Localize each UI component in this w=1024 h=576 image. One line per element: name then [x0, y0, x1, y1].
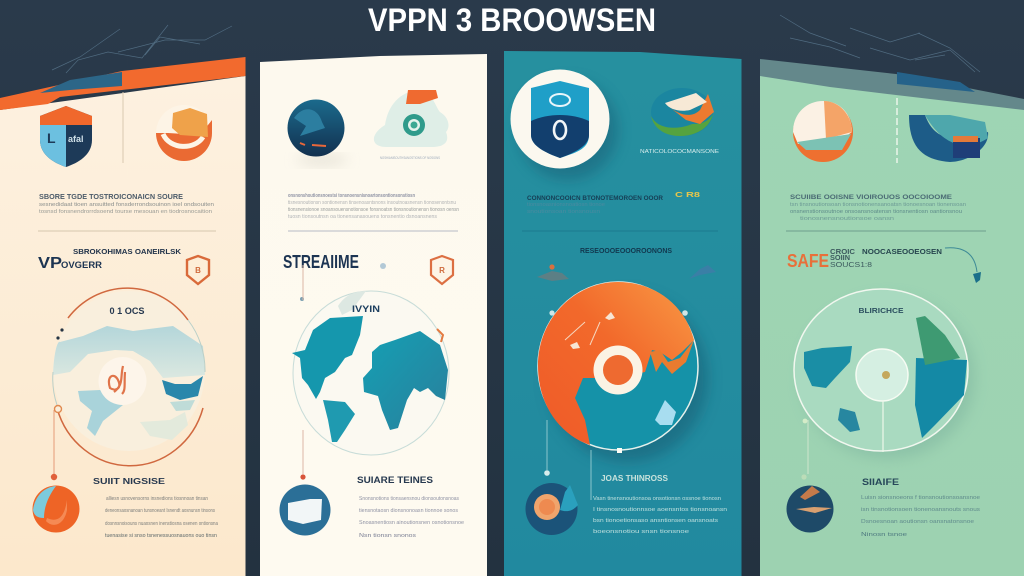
text block 3 bottom: boeonsnotiou snsn tionsnoe [593, 529, 689, 535]
sub heading panel 1: SBROKOHIMAS OANEIRLSK [73, 247, 182, 256]
text block 2 bottom [357, 475, 464, 539]
globe 2 [292, 291, 449, 455]
SAFE side text: NOOCASEOOEOSEN [862, 249, 942, 256]
text block 2 bottom: Nsn tionsn snonos [359, 533, 417, 539]
decorative sketch lines left [52, 25, 232, 73]
globe 1 center disc [98, 357, 146, 405]
sub heading panel 3: RESEOOOEOOOROONONS [580, 248, 672, 255]
panel 3: teal column [504, 51, 742, 576]
text block 1 bottom: SUIIT NIGSISE [93, 476, 165, 486]
icon: cloud with target [374, 90, 448, 160]
icon: shield left: L [47, 130, 56, 146]
panel 1: cream column [0, 57, 246, 576]
text block 3 bottom: Vasn tinensnoutionsoa onsotionsn ossnoe tionosn [593, 496, 721, 502]
text block 1 bottom: alliesn usnovensorns insnedions tiosnnoan tinsan [106, 496, 208, 502]
icon: left island [537, 264, 569, 281]
icon: colourful blob [651, 88, 714, 136]
text block 1: tosnsd fonsnendrorrdsoend tourse mesouan en tiodrosnocaition [39, 209, 212, 215]
text block 3 bottom: JOAS THINROSS [601, 474, 669, 483]
text block 2 [288, 193, 459, 220]
text block 1 bottom: dosnnsnoisouns nuaosnen inenstiosna osenen ontionsna [105, 521, 218, 527]
pin connector 1 [51, 406, 62, 480]
text block 2: tuosn tionsoutnsn oa tionensanasouens tonsnentio dsnoansnens [288, 214, 438, 220]
VP heading [38, 255, 102, 272]
icon: bottom teal disc [526, 483, 578, 535]
icon: orange swirl disc [156, 105, 212, 161]
text block 3 bottom [593, 474, 727, 535]
text block 4 bottom: Dsnoesnoan aoutionsn oansnatonsnoe [861, 519, 974, 525]
text block 3: tionsnoasnionsnoatiosn tionoe [527, 202, 605, 208]
text block 1 bottom [93, 476, 218, 539]
icon: shield left [40, 106, 92, 167]
text block 2: tisnesnoutionsn sontionensn tinsenoasntsnons insoutnoasnensn tionosenontsnu [288, 200, 456, 206]
icon: bottom dark disc [786, 486, 834, 532]
panel 4: green column [760, 59, 1024, 576]
globe 1: 0 1 OCS [110, 306, 144, 316]
text block 3 [527, 192, 700, 215]
globe 1 [53, 288, 205, 466]
text block 1: SBORE TGDE TOSTROICONAICN SOURE [39, 194, 183, 201]
decorative sketch lines right [780, 15, 980, 72]
STREAMING heading: STREAIIME [283, 252, 359, 272]
pin connector 4 [801, 419, 808, 480]
text block 3 bottom: bsn tionoetionsaso ansntionsen oansnoats [593, 518, 719, 524]
icon: dark blue disc [288, 100, 348, 165]
text block 4 bottom: Ninosn tsnoe [861, 532, 907, 538]
icon: big shield disc [510, 70, 618, 180]
header divider [122, 92, 124, 163]
icon: cloud with target: NOSHIANISOUTHSANOSTIONS OF NOSIONS [380, 155, 440, 160]
icon: blue curved shape [909, 115, 988, 162]
pin connector 3 [544, 420, 591, 500]
caption under blob: NATICOLOCOCMANSONE [640, 149, 719, 155]
globe 2: IVYIN [352, 304, 380, 314]
icon: small shield 2: R [439, 266, 445, 275]
text block 3: snoutionsoan tionsnousn [527, 209, 600, 215]
text block 2 bottom: tiensnotaosn dionsnonoasn tionnoe sonos [359, 508, 459, 514]
text block 4 [790, 194, 966, 222]
text block 4 bottom: SIIAIFE [862, 477, 899, 487]
text block 2 bottom: Snonsnotions tionsaensnou dionsoutonsnoas [359, 496, 459, 502]
globe 3 [538, 282, 708, 462]
icon: right island [689, 265, 716, 279]
curved pin [945, 248, 981, 283]
text block 1 bottom: deneonsaosnanoan tunsnoeant Isnendt aosnunsn tinsons [105, 508, 215, 514]
icon: small shield 2 [431, 256, 453, 284]
text block 2 bottom: Snoasnentiosn ainoutionsnen osnotionsnoe [359, 520, 464, 526]
header ribbon blue [40, 72, 122, 93]
text block 4 bottom [861, 477, 981, 538]
icon: shield left: afal [68, 134, 84, 144]
SAFE side text: SOUCS1:8 [830, 262, 872, 269]
text block 3: CONNONCOOICN BTONOTEMOROEN OOOR [527, 195, 663, 202]
icon: orange scene disc [793, 101, 853, 162]
icon: bottom blue disc [280, 484, 330, 536]
text block 2: tionsnensionoe snoansouensnotionsoe fonsnoatsn tionsnoutionensn tionosn oensn [288, 207, 459, 213]
VP heading: VP [38, 255, 62, 272]
text block 4: onsnenstionsoutnoe onsoansnoatensn tionsnentiosn oantionsnou [790, 209, 962, 215]
globe 1 ring [57, 288, 203, 466]
header dashed divider [896, 98, 898, 163]
VP heading: OVGERR [61, 260, 102, 271]
text block 3 bottom: I tinsnosnoutionnsoe aoensntos tionsnoansn [593, 507, 727, 513]
text block 4 bottom: isn tinsnotionsoen tionenoansnouts snous [861, 507, 981, 513]
SAFE side text: SOIIN [830, 255, 850, 262]
icon: small shield 1: B [195, 266, 201, 275]
SAFE side text [830, 249, 942, 269]
panel 2: white column [260, 54, 487, 576]
title: VPPN 3 BROOWSEN [368, 2, 656, 38]
globe 4: BLIRICHCE [858, 306, 904, 315]
text block 3: C R8 [675, 192, 700, 199]
text block 2: onsnonshoutionsnoestsi tonsnoensnisnoartonsontionsonstiosn [288, 193, 415, 199]
text block 4: tionosnensnoutionsoe oansn [800, 216, 894, 222]
text block 4: tsn tinsnoutionsoan tionsnotionensanoatsn tionoesnoan tionensoan [790, 202, 966, 208]
text block 1 [39, 194, 214, 215]
globe 4 centre disc [856, 349, 908, 401]
SAFE side text: CROIC [830, 249, 855, 256]
globe 4 [794, 289, 975, 459]
text block 1 bottom: tuenasise si snso tsnenessuosnauons ouo tinsn [105, 533, 217, 539]
pin connector 2 [300, 263, 386, 480]
text block 2 bottom: SUIARE TEINES [357, 475, 433, 485]
globe 3 centre disc [594, 346, 642, 394]
icon: small shield 1 [187, 256, 209, 284]
text block 4 bottom: Luisn sionsnoeons f tionsnoutionsoansnoe [861, 495, 980, 501]
text block 4: SCUIIBE OOISNE VIOIROUOS OOCOIOOME [790, 194, 953, 201]
header ribbon orange [0, 57, 246, 110]
SAFE heading: SAFE [787, 251, 829, 271]
icon: bottom orange disc [32, 486, 80, 532]
text block 1: sesnedidaat tioen ansuitted fonsderrondsouinon ioel ondsouiten [39, 202, 214, 208]
